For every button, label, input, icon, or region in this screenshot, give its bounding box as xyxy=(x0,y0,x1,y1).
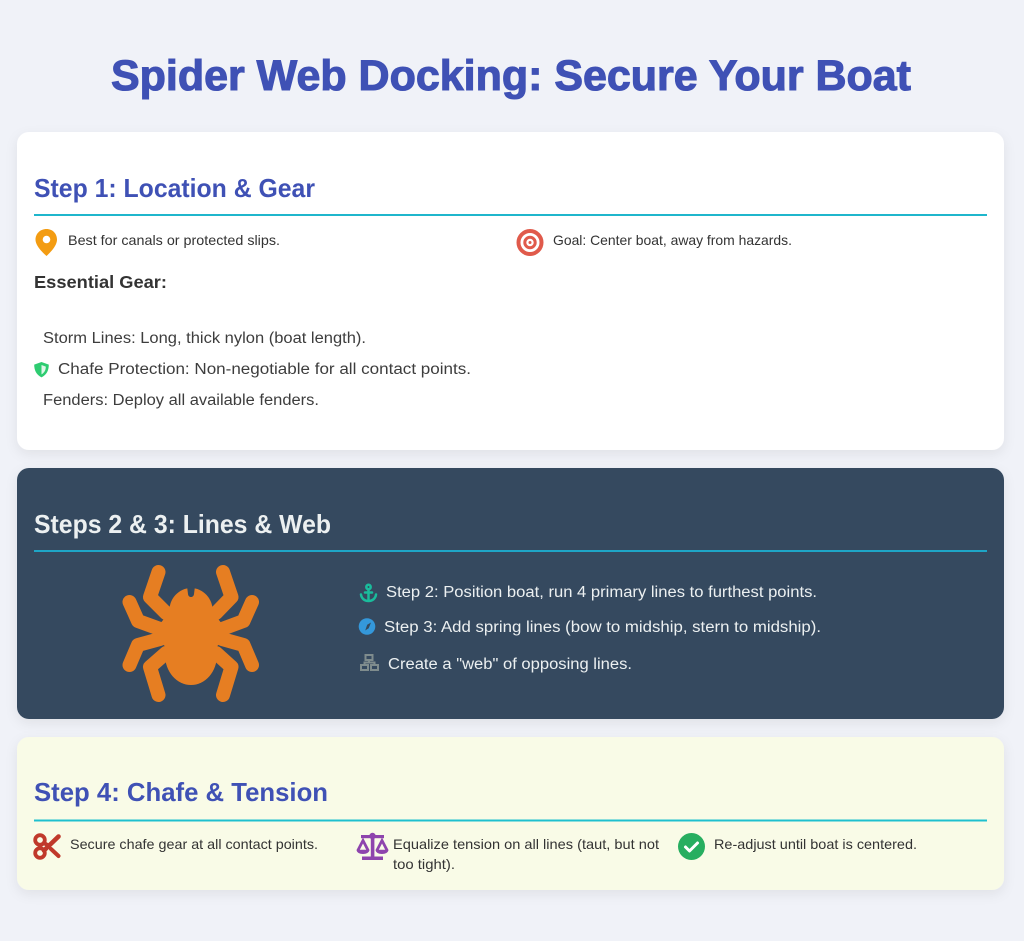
icon: anchor xyxy=(361,585,376,601)
text: step 3: Step 3: Add spring lines (bow to midship, stern to midship). xyxy=(384,619,821,636)
text: storm lines: Storm Lines: Long, thick nylon (boat length). xyxy=(43,330,366,347)
text: equalize tension xyxy=(393,836,659,872)
heading: step 1: Step 1: Location & Gear xyxy=(34,173,315,203)
icon: shield xyxy=(34,362,49,377)
panel: steps 2 and 3 lines and web xyxy=(17,468,1004,719)
icon: scissors xyxy=(35,835,58,858)
panel: step 1 location and gear xyxy=(17,132,1004,450)
heading: step 4: Step 4: Chafe & Tension xyxy=(34,777,328,807)
icon: map pin xyxy=(36,229,57,256)
text: secure chafe: Secure chafe gear at all contact points. xyxy=(70,836,318,852)
text: equalize tension: too tight). xyxy=(393,856,455,872)
icon: compass xyxy=(359,618,375,635)
panel: step 4 chafe and tension xyxy=(17,737,1004,890)
heading: steps 2 and 3: Steps 2 & 3: Lines & Web xyxy=(34,509,331,539)
text: goal: Goal: Center boat, away from hazards. xyxy=(553,232,792,248)
icon: sitemap xyxy=(361,655,378,670)
icon: check circle xyxy=(678,833,705,860)
text: location: Best for canals or protected slips. xyxy=(68,232,280,248)
text: step 2: Step 2: Position boat, run 4 primary lines to furthest points. xyxy=(386,584,817,601)
text: equalize tension: Equalize tension on all lines (taut, but not xyxy=(393,836,659,852)
text: chafe protection: Chafe Protection: Non-negotiable for all contact points. xyxy=(58,361,471,378)
icon: target xyxy=(518,231,542,254)
icon: spider xyxy=(130,572,252,695)
icon: scales xyxy=(356,833,388,860)
text: fenders: Fenders: Deploy all available fenders. xyxy=(43,392,319,409)
title: Spider Web Docking: Secure Your Boat xyxy=(111,52,911,100)
text: re-adjust: Re-adjust until boat is centered. xyxy=(714,836,917,852)
subheading: essential gear: Essential Gear: xyxy=(34,272,167,292)
text: web: Create a "web" of opposing lines. xyxy=(388,656,632,673)
